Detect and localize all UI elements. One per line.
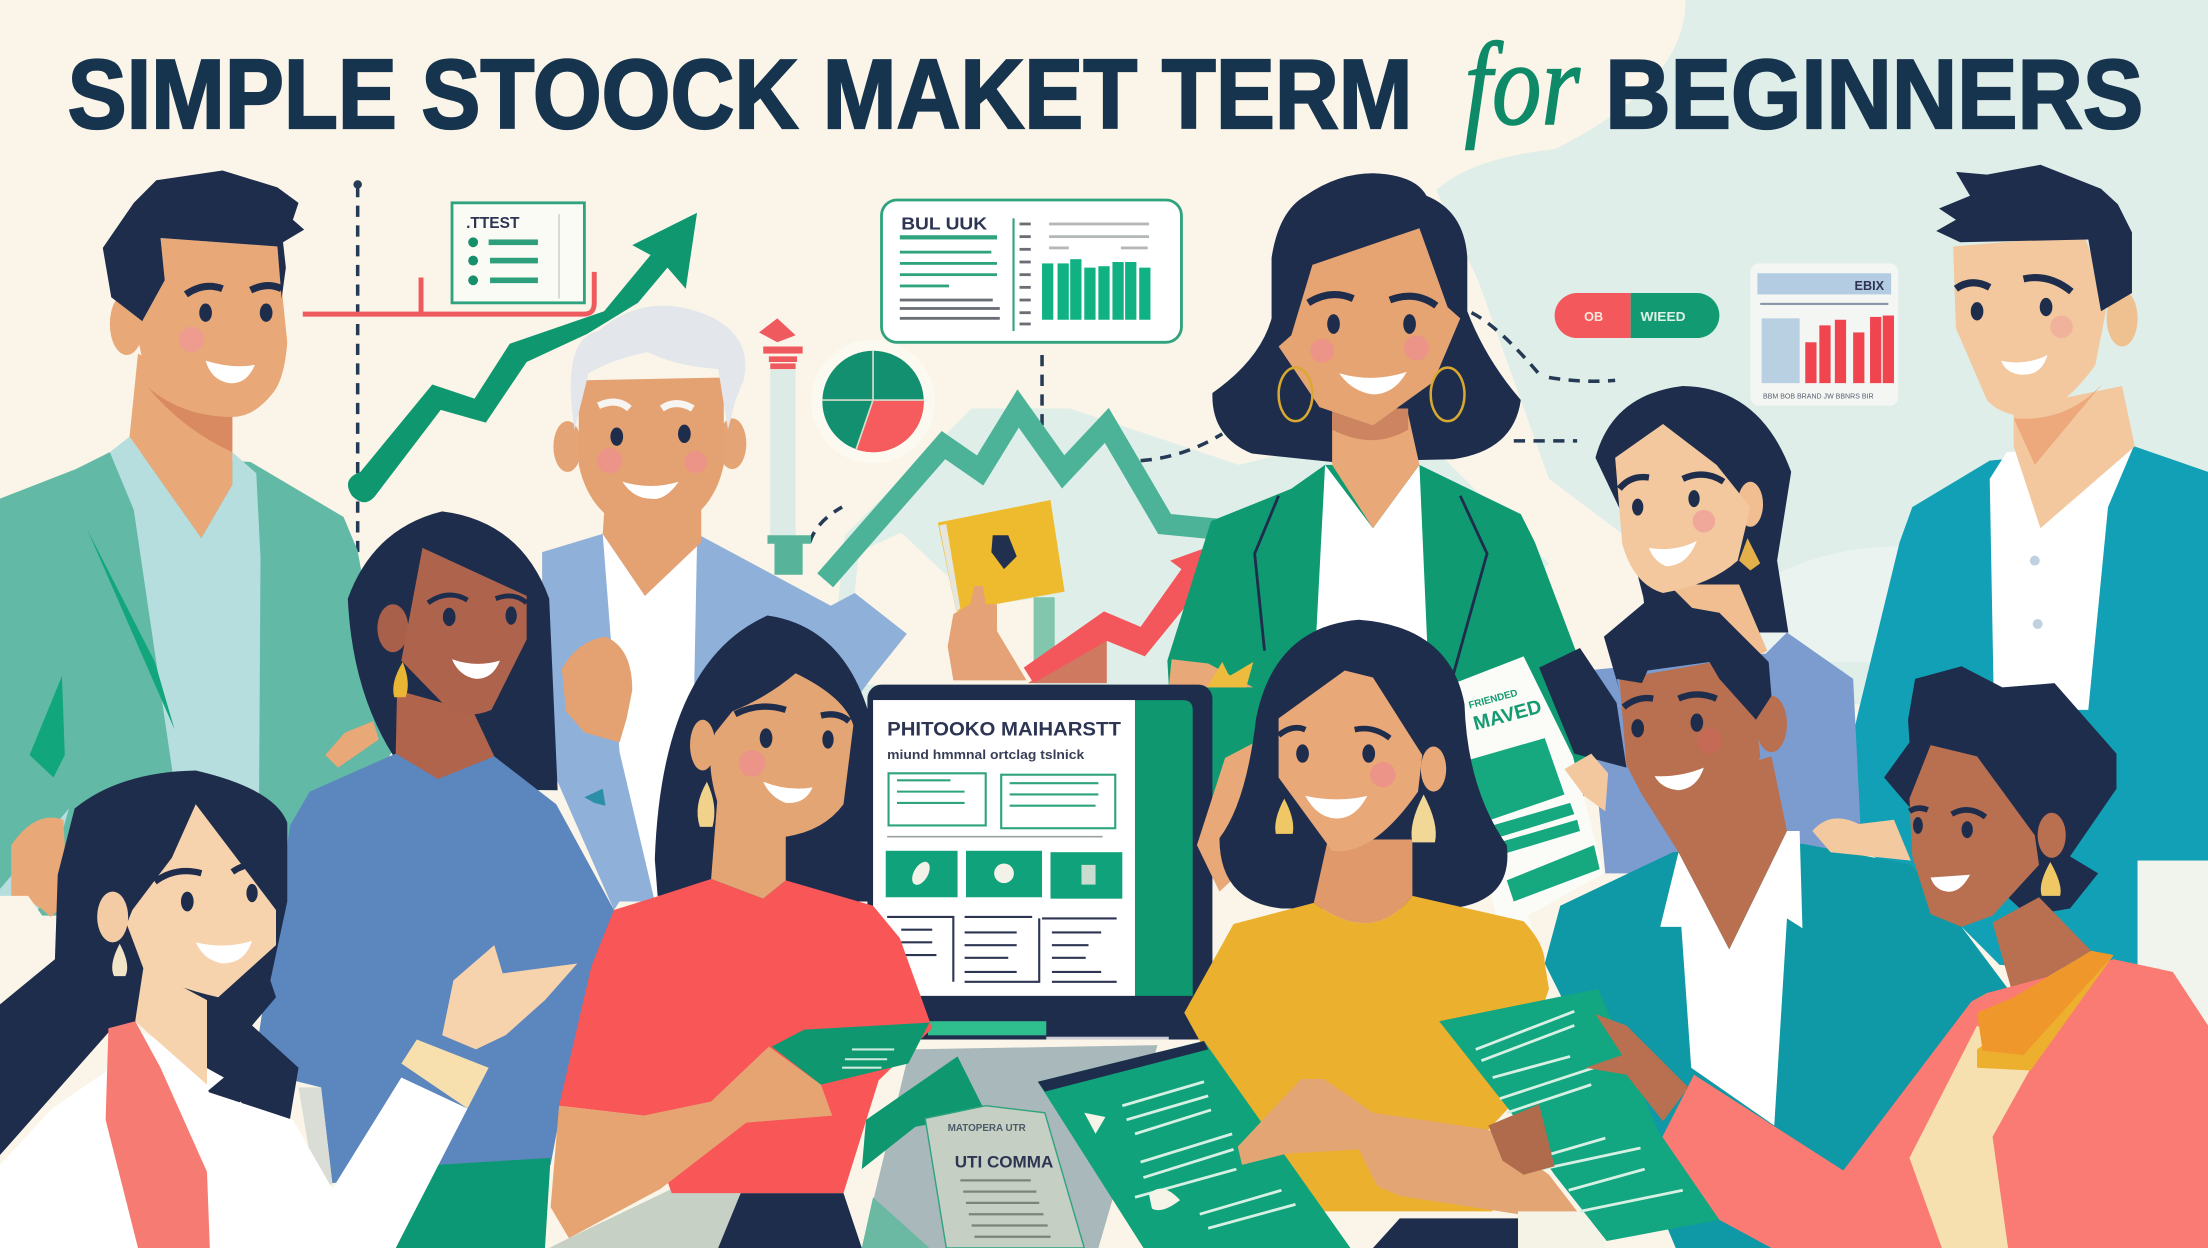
person: man in teal blazer, far right: [1849, 165, 2208, 1016]
bull card with bar chart: [882, 200, 1181, 342]
title: [68, 19, 2143, 150]
pill label: WIEED: [1641, 310, 1686, 324]
red rising arrow: [1024, 541, 1225, 683]
red bar chart card: BBM BOB BRAND JW BBNRS BIR: [1763, 394, 1874, 401]
person: man in green blazer: [0, 170, 393, 1004]
red bar chart card: [1750, 263, 1898, 406]
pale column: [759, 318, 811, 575]
desk surface with certificate: MATOPERA UTR: [948, 1123, 1026, 1134]
person: dark-skinned woman in coral blazer: [1660, 666, 2208, 1248]
bull card with bar chart: BUL UUK: [901, 214, 987, 234]
desk surface with certificate: UTI COMMA: [955, 1153, 1053, 1172]
desk surface with certificate: [862, 1045, 1158, 1248]
test card: .TTEST: [466, 215, 520, 232]
paper: document held at centre right: [1452, 648, 1626, 1014]
title: for: [1464, 19, 1581, 150]
laptop with dashboard screen: miund hmmnal ortclag tslnick: [887, 748, 1085, 762]
laptop with dashboard screen: PHITOOKO MAIHARSTT: [887, 718, 1121, 740]
title: BEGINNERS: [1605, 39, 2143, 149]
person: woman with blue top, right: [1586, 386, 1862, 873]
green rising arrow: [348, 213, 697, 502]
person: woman in red top: [549, 616, 932, 1248]
laptop with dashboard screen: [867, 685, 1212, 1040]
green pamphlet: [1038, 1041, 1605, 1248]
pill label: [1555, 293, 1719, 338]
dashed guide lines: [353, 180, 1615, 556]
red bar chart card: EBIX: [1855, 279, 1885, 293]
red axis line: [303, 272, 594, 314]
person: dark-skinned woman in blue sweater: [253, 511, 614, 1248]
person: man in teal jacket, front right: [1545, 600, 2008, 1248]
paper: document held at centre right: FRIENDED: [1468, 688, 1519, 711]
yellow folder and hand: [938, 500, 1065, 680]
mountain line chart: [825, 408, 1222, 580]
test card: [452, 203, 584, 303]
pill label: OB: [1584, 310, 1603, 324]
person: woman in yellow top: [1184, 620, 1549, 1211]
pie chart: [811, 339, 935, 463]
person: woman in white blouse, front left: [0, 770, 577, 1248]
paper: document held at centre right: MAVED: [1471, 696, 1544, 735]
person: central woman in green blazer: [1167, 173, 1591, 796]
title: SIMPLE STOOCK MAKET TERM: [68, 39, 1412, 149]
green booklet in hand: [1439, 989, 1719, 1241]
person: older man in blue blazer: [542, 306, 907, 910]
